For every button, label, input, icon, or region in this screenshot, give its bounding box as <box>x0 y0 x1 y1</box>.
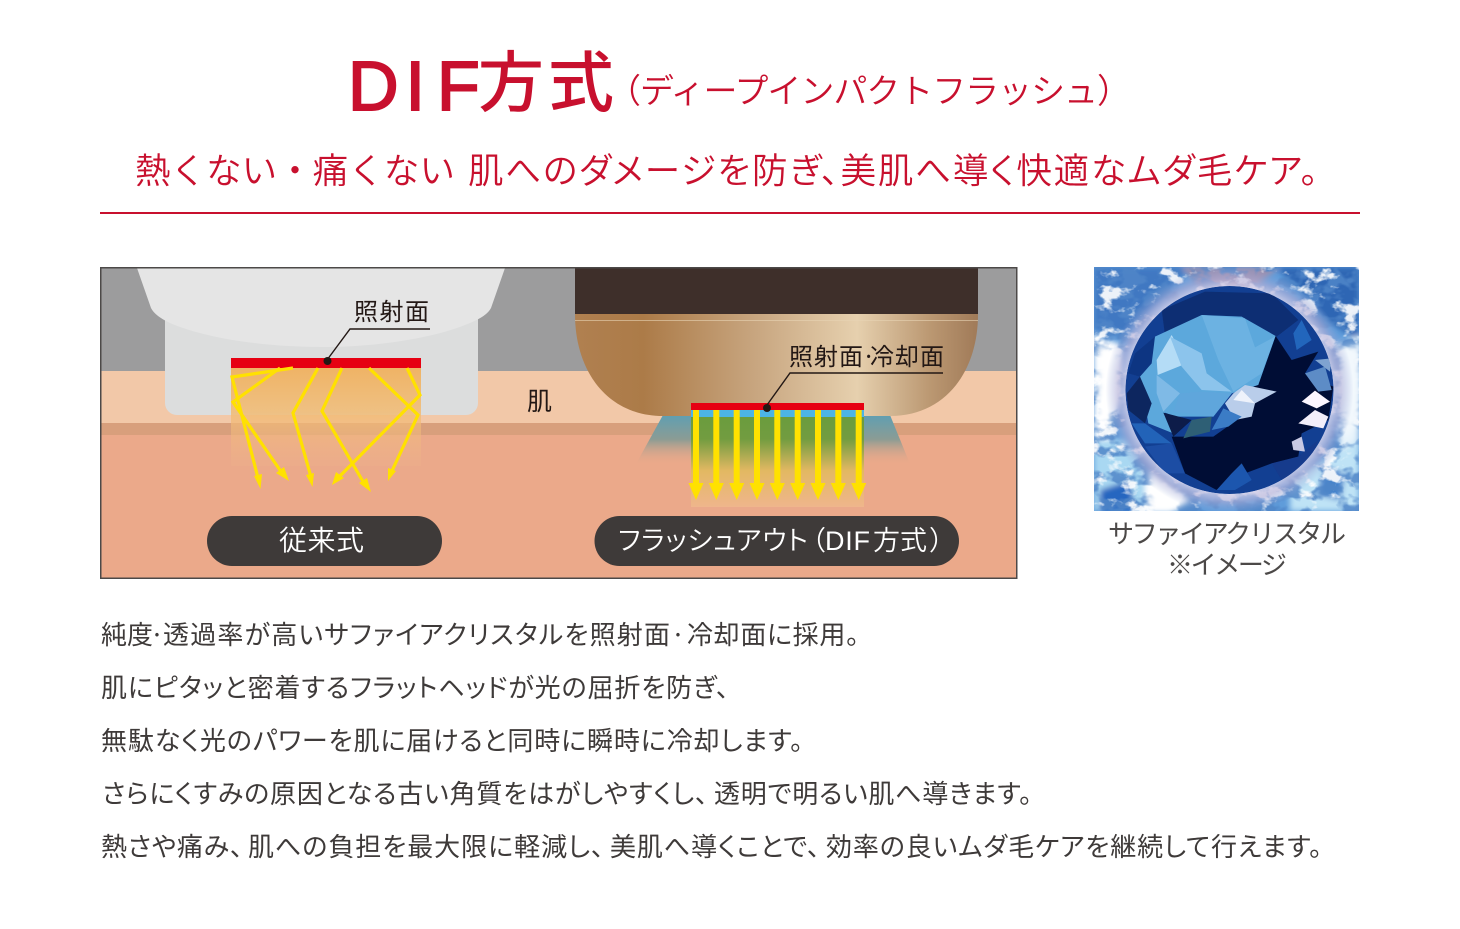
pill: フラッシュアウト(DIF方式) <box>594 516 959 566</box>
caption: サファイアクリスタル ※イメージ <box>1108 514 1346 582</box>
panel border <box>101 268 1017 578</box>
background: upper skin <box>101 371 1017 424</box>
device: DIF head gold <box>575 314 978 416</box>
body text: 透過率が高いサファイアクリスタルを照射面 <box>163 615 670 652</box>
pill: フラッシュアウト(DIF方式): ） <box>929 519 956 558</box>
callout: 照射面 <box>324 292 430 365</box>
body text: 肌への負担を最大限に軽減し、 <box>248 827 604 864</box>
callout: 照射面・冷却面: · <box>862 337 875 372</box>
gemstone <box>1126 286 1334 494</box>
ice vein texture: white <box>1094 267 1359 511</box>
body text: 純度 <box>101 615 153 652</box>
irradiation surface: conventional <box>231 358 421 368</box>
ice background <box>1094 267 1359 511</box>
title: DIF方式: 方式 <box>478 30 614 126</box>
ice vein texture: dark <box>1094 267 1359 511</box>
caption: サファイアクリスタル ※イメージ: ※イメージ <box>1167 545 1287 582</box>
body text: 美肌へ導くことで、 <box>610 827 820 864</box>
pill: フラッシュアウト(DIF方式): （ <box>799 519 826 558</box>
device: gold highlight line <box>575 320 978 321</box>
light zone: conventional <box>231 368 421 466</box>
pill: 従来式: 従来式 <box>279 519 364 559</box>
subtitle: 肌へのダメージを防ぎ、美肌へ導く快適なムダ毛ケア。 <box>468 143 1318 194</box>
background: lower skin <box>101 435 1017 578</box>
title: DIF方式 <box>348 30 614 126</box>
callout: 照射面: 照射面 <box>354 292 429 327</box>
body text: 冷却面に採用。 <box>687 615 859 652</box>
body text: 熱さや痛み、 <box>101 827 243 864</box>
pill: フラッシュアウト(DIF方式): フラッシュアウト <box>618 519 808 558</box>
label: 肌: 肌 <box>527 382 552 418</box>
pill: 従来式 <box>207 516 442 566</box>
heading divider <box>100 212 1360 214</box>
irradiation surface: DIF <box>691 403 864 410</box>
cooling spread <box>636 415 910 464</box>
glow ring <box>1106 266 1354 514</box>
infographic canvas <box>100 50 1360 858</box>
title reading: ディープインパクトフラッシュ: （ディープインパクトフラッシュ） <box>607 64 1131 113</box>
ice large shapes <box>1094 267 1359 511</box>
body text: 効率の良いムダ毛ケアを継続して行えます。 <box>826 827 1322 864</box>
image: sapphire crystal <box>1094 266 1359 514</box>
device: conventional head <box>137 268 505 415</box>
body text: 透明で明るい肌へ導きます。 <box>714 774 1032 811</box>
subtitle: 熱くない・痛くない <box>135 143 455 194</box>
panel: comparison diagram <box>101 268 1017 578</box>
ray arrowheads <box>254 467 396 492</box>
body text: さらにくすみの原因となる古い角質をはがしやすくし、 <box>102 774 708 811</box>
ice highlight: left and lower-left <box>1098 345 1359 511</box>
light zone: DIF <box>691 416 864 507</box>
title: DIF方式: I <box>406 47 425 125</box>
body text: 無駄なく光のパワーを肌に届けると同時に瞬時に冷却します。 <box>101 721 803 758</box>
caption: サファイアクリスタル ※イメージ: サファイアクリスタル <box>1108 514 1346 551</box>
cooling layer <box>691 409 864 417</box>
scattered light rays <box>232 368 420 485</box>
background: skin band <box>101 423 1017 435</box>
straight light arrows <box>688 410 866 500</box>
pill: フラッシュアウト(DIF方式): 方式 <box>873 519 927 558</box>
body text: · <box>150 615 164 652</box>
title: DIF方式: F <box>437 47 480 125</box>
body text: · <box>671 615 685 652</box>
body text <box>101 615 1322 864</box>
callout: 照射面・冷却面: 照射面 <box>789 337 863 372</box>
title: DIF方式: D <box>348 47 399 125</box>
background: air <box>101 268 1017 372</box>
device: DIF head dark <box>575 268 978 314</box>
body text: 肌にピタッと密着するフラットヘッドが光の屈折を防ぎ、 <box>101 668 729 705</box>
callout: 照射面・冷却面: 冷却面 <box>870 337 944 372</box>
callout: 照射面・冷却面 <box>763 337 944 412</box>
pill: フラッシュアウト(DIF方式): DIF <box>825 526 870 556</box>
